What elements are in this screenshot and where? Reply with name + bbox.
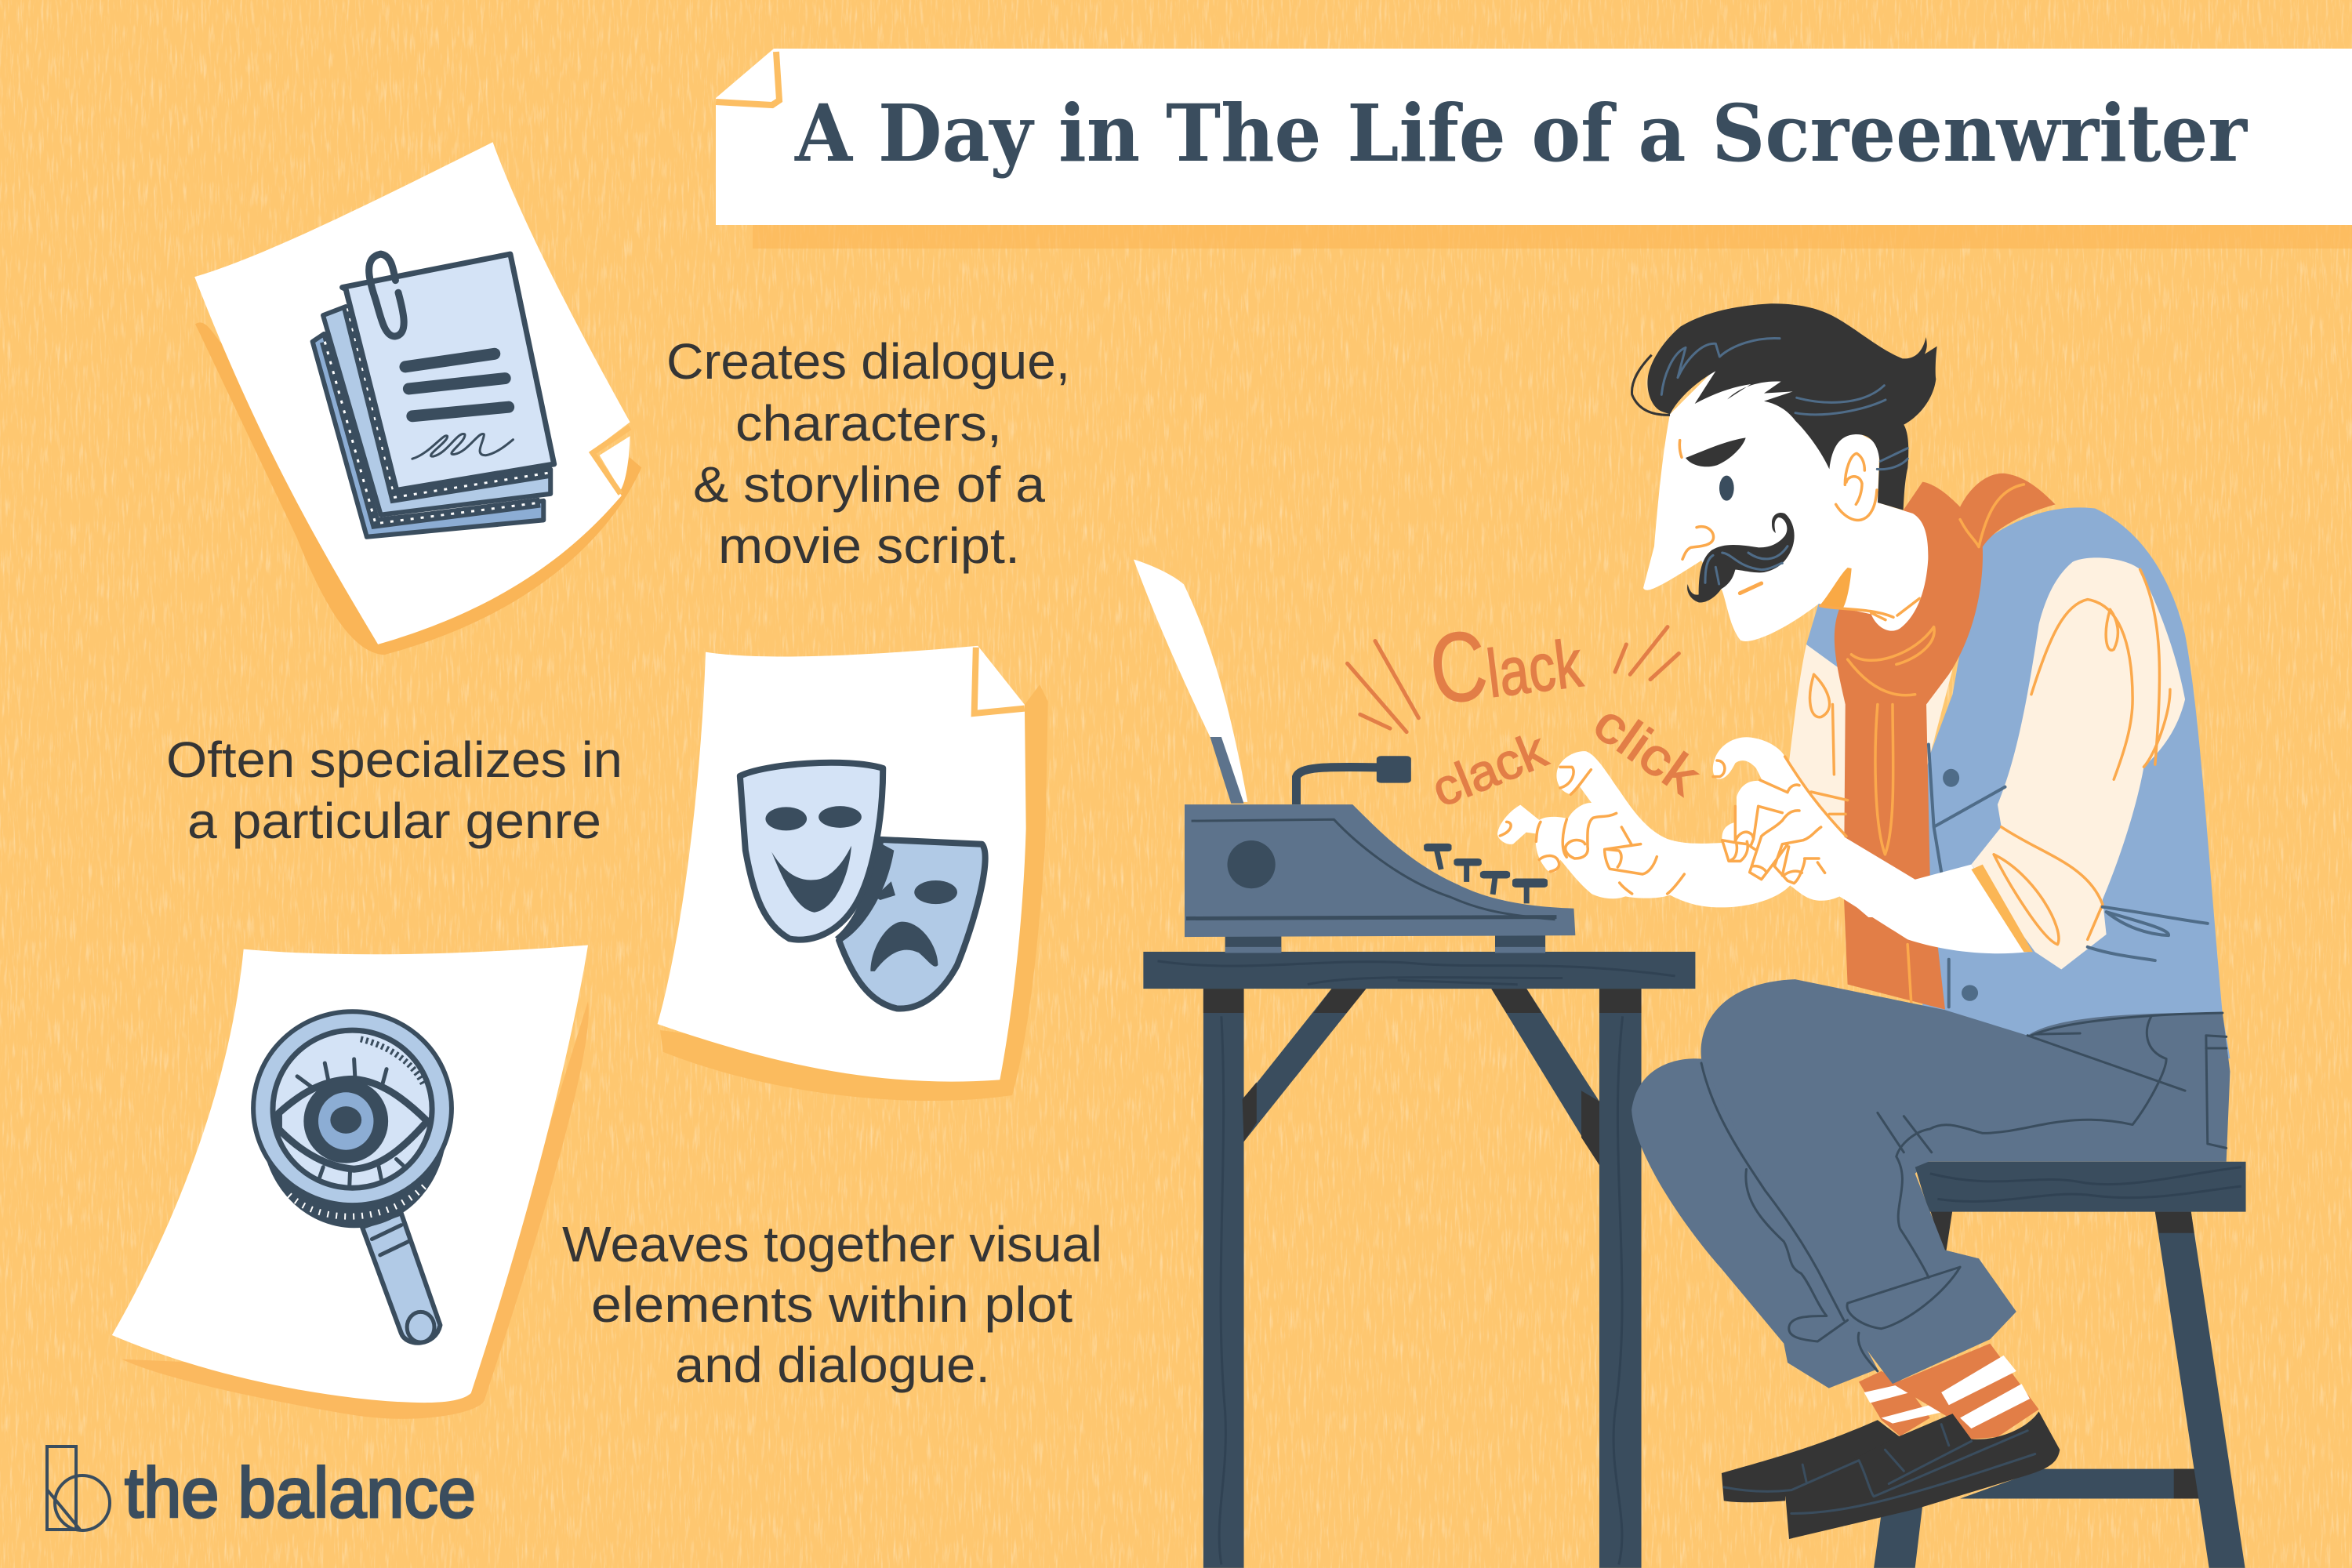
text block: weaves together visual elements: and dialogue. (675, 1337, 990, 1393)
icon: comedy and tragedy masks (740, 763, 985, 1008)
icon: magnifying glass over an eye (253, 1011, 452, 1343)
table (1143, 952, 1695, 1568)
text block: creates dialogue: Creates dialogue, (666, 333, 1070, 390)
text block: weaves together visual elements: Weaves together visual (562, 1216, 1102, 1272)
text block: creates dialogue: & storyline of a (693, 456, 1045, 513)
shirt sleeve (1971, 557, 2185, 970)
icon: stacked script pages with paperclip (313, 254, 554, 537)
vest details (1929, 745, 2208, 1007)
sound effect: typing lines and words: clack (1424, 721, 1555, 818)
typewriter paper sheet (1134, 560, 1247, 802)
socks (1859, 1371, 1930, 1436)
text block: creates dialogue: characters, (735, 395, 1002, 452)
panel: title banner (716, 49, 2352, 249)
panel: paper with script pages icon (194, 142, 641, 655)
back trouser leg (1632, 1058, 1878, 1388)
eye and eyebrow (1719, 476, 1734, 501)
stool seat (1915, 1162, 2246, 1212)
text block: creates dialogue (666, 333, 1070, 574)
scarf (1835, 474, 2056, 1010)
sound effect: typing lines and words: click (1584, 693, 1711, 806)
stool legs (1874, 1210, 2245, 1568)
forearm (1836, 834, 2027, 953)
vest (1922, 507, 2230, 1058)
text block: specializes in a genre: a particular genre (187, 793, 601, 849)
text block: specializes in a genre: Often specializes in (166, 731, 622, 788)
illustration: screenwriter at stool (1497, 303, 2246, 1568)
typing hands (1497, 737, 1882, 917)
torso and shirt (1788, 474, 2230, 1058)
front trouser leg (1701, 979, 2230, 1384)
moustache (1687, 513, 1795, 603)
text block: weaves together visual elements (562, 1216, 1102, 1393)
head (1632, 303, 1937, 641)
panel: paper with theatre masks icon (658, 646, 1048, 1101)
sound effect: typing lines and words (1348, 597, 1711, 818)
ear lines (1836, 453, 1877, 520)
text block: specializes in a genre (166, 731, 622, 849)
typewriter (1134, 560, 1575, 953)
face (1643, 368, 1928, 641)
logo: the balance: the balance (125, 1454, 476, 1533)
panel: paper with magnifying glass icon (112, 946, 589, 1419)
title: A Day in The Life of a Screenwriter (794, 87, 2248, 180)
text block: creates dialogue: movie script. (718, 517, 1020, 574)
legs, stool seat, socks and shoes (1632, 979, 2246, 1539)
hair (1647, 303, 1937, 510)
sound effect: typing lines and words: Clack (1424, 597, 1587, 724)
shoes (1722, 1420, 1900, 1502)
text block: weaves together visual elements: elements within plot (591, 1276, 1073, 1333)
